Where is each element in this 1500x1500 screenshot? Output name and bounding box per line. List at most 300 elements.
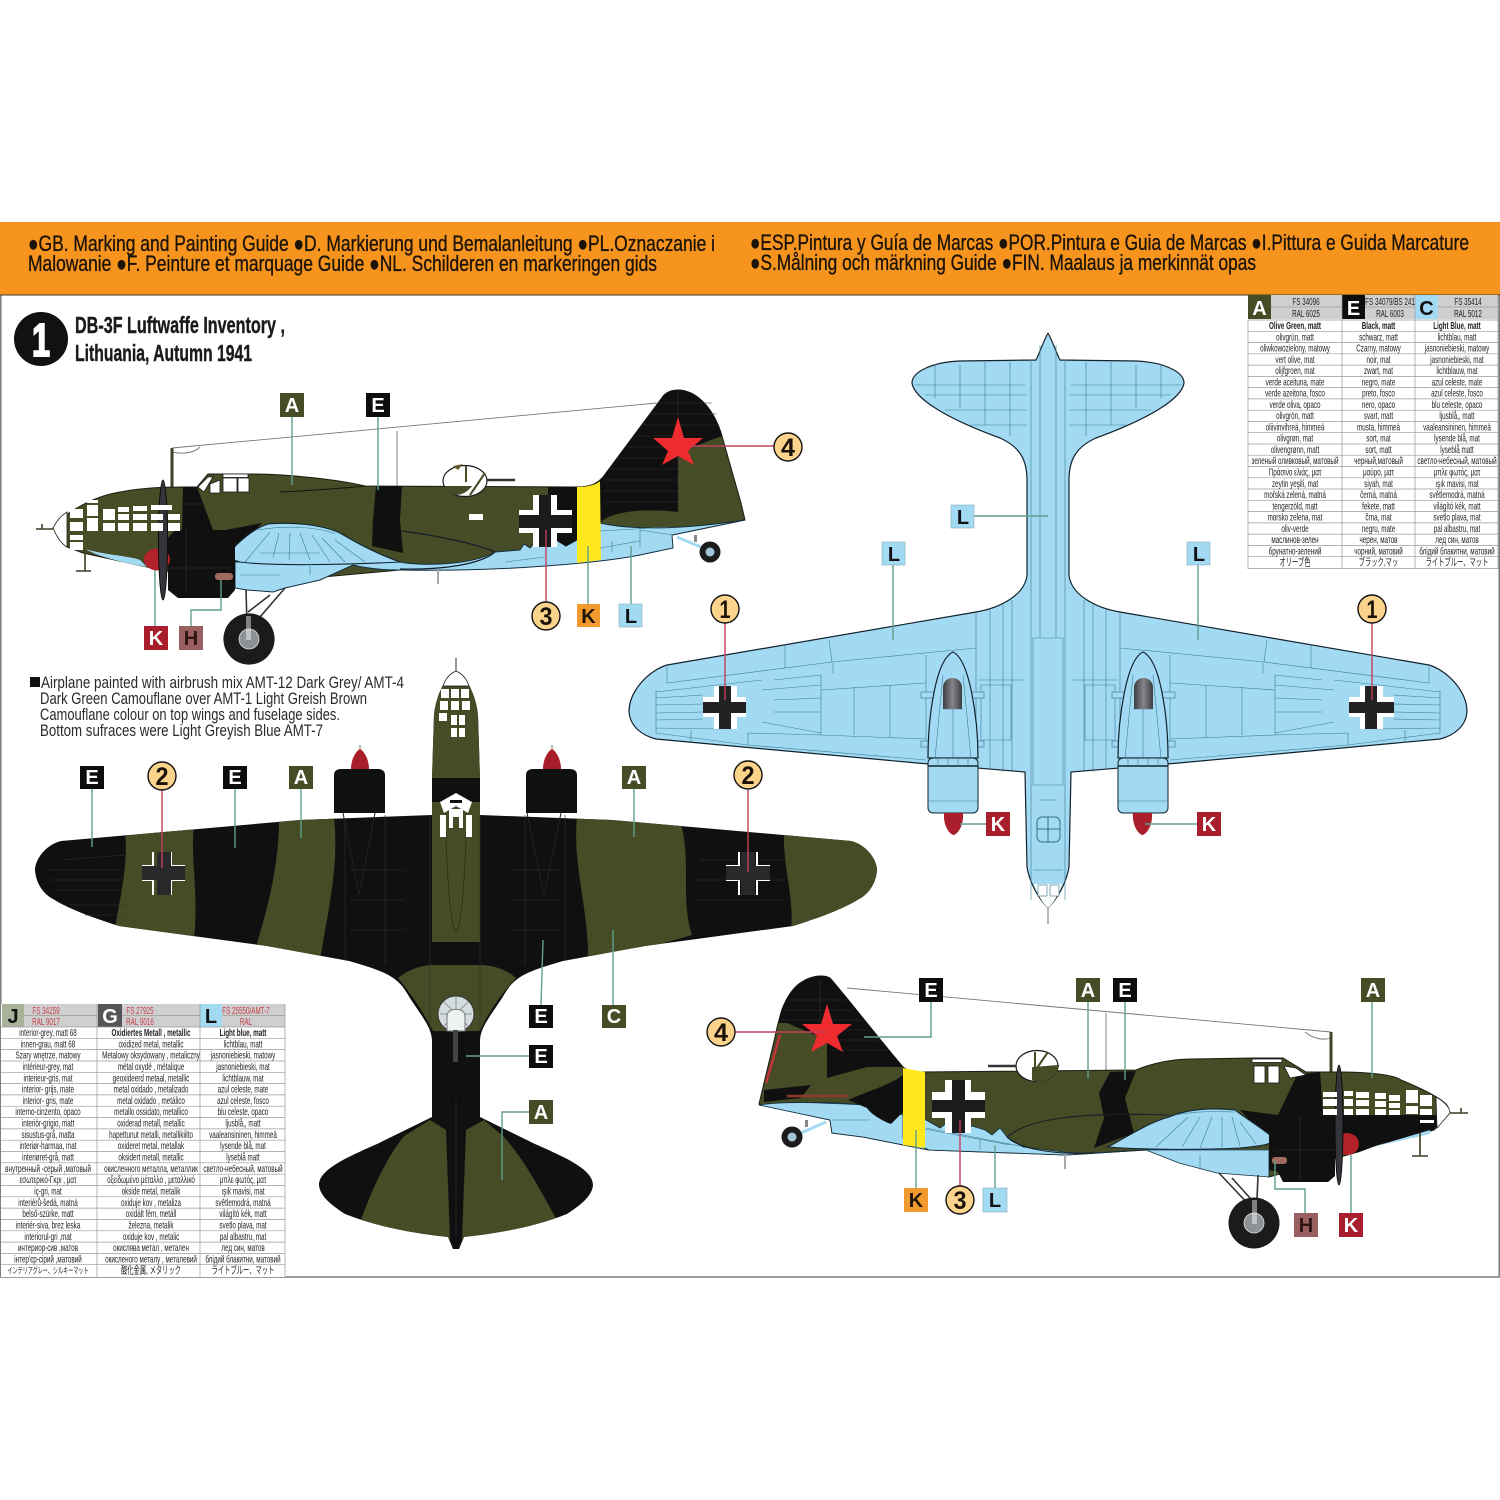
colour tag A, tailplane	[529, 1100, 553, 1124]
spinner red	[144, 548, 170, 570]
propeller	[158, 480, 168, 600]
column G names: окислява метал , метален	[113, 1241, 189, 1254]
outline	[629, 333, 1048, 908]
belly stub	[1064, 1155, 1066, 1169]
column J names: інтер'єр-сірий ,матовий	[14, 1253, 82, 1265]
soviet star	[802, 1004, 852, 1052]
column L names: azul celeste, mate	[218, 1083, 268, 1095]
callout 3, side view 2: 3	[954, 1187, 966, 1215]
fuselage olive base	[759, 976, 1450, 1177]
underside right half mirrored	[1048, 333, 1467, 908]
column G names: metal oxidado , metálico	[117, 1094, 185, 1106]
colour tag A, right wing top view	[622, 766, 646, 789]
column J names: interiør-harmaa, mat	[20, 1139, 77, 1152]
column A names: olivgrön, matt	[1276, 409, 1314, 422]
colour tag K, right spinner: K	[1202, 814, 1217, 836]
gunner turret	[1016, 1050, 1058, 1082]
column A names: olivengrønn, matt	[1271, 443, 1320, 455]
header codes C: FS 35414	[1454, 295, 1482, 307]
column J names: interior- gris, mate	[23, 1094, 73, 1106]
nacelle gear bay lines	[935, 675, 971, 758]
colour tag C	[602, 1005, 626, 1028]
column A names: tengerzöld, matt	[1272, 500, 1318, 512]
column L names: pal albastru, mat	[220, 1230, 267, 1242]
canopy	[1252, 1059, 1306, 1083]
callout 4, side view 2	[707, 1018, 735, 1047]
column C names: светло-небесный, матовый	[1417, 454, 1497, 467]
column J names: interior-grey, matt 68	[19, 1026, 77, 1038]
fin panel lines	[603, 392, 719, 512]
nose olive	[432, 671, 480, 778]
aircraft: top view	[35, 658, 885, 1249]
title	[75, 312, 285, 366]
column C names: ljusblå,, matt	[1439, 409, 1475, 422]
wing black shadow	[1240, 1110, 1278, 1145]
column J names: interieur-gris, mat	[24, 1072, 73, 1084]
column L names: ライトブルー、マット	[212, 1263, 274, 1276]
column C names: лед син, матов	[1435, 533, 1479, 546]
column C names: jasnoniebieski, matowy	[1424, 342, 1490, 354]
colour table: A E C: E	[1347, 298, 1360, 320]
nose glass	[1034, 884, 1062, 924]
scheme number badge: 1	[32, 314, 50, 366]
column A names: verde azeitona, fosco	[1265, 387, 1325, 399]
column C names: lichtblauw, mat	[1436, 364, 1478, 377]
colour tag E, fin side view 2	[919, 978, 943, 1002]
column L names: лед син, матов	[221, 1241, 265, 1254]
column C names: svetlo plava, mat	[1433, 511, 1481, 523]
colour tag H, side view 2: H	[1299, 1215, 1313, 1237]
balkenkreuz fuselage	[519, 495, 572, 547]
colour tag K, left spinner: K	[991, 814, 1006, 836]
engine block	[928, 758, 978, 813]
colour tag K orange, side view 1: K	[581, 606, 596, 628]
column J names: интериор-сив ,матов	[18, 1241, 78, 1254]
belly stub	[437, 570, 439, 584]
column G names: métal oxydé , métalique	[118, 1060, 184, 1072]
column C names: lysende blå, mat	[1434, 432, 1480, 444]
column E names: negru, mate	[1362, 522, 1395, 534]
colour tag L, left wing underside: L	[888, 544, 900, 566]
colour tag E, wing tip top view	[80, 766, 104, 789]
column A names: zeytin yeşili, mat	[1272, 477, 1318, 489]
colour tag E, fin side view 2: E	[924, 980, 938, 1002]
yellow band	[577, 481, 601, 563]
column J names: sisustus-grå, matta	[21, 1128, 75, 1140]
note text block: Bottom sufraces were Light Greyish Blue AMT-7	[40, 722, 323, 740]
colour tag A, side view 1: A	[285, 395, 299, 417]
blue belly	[759, 1103, 1269, 1177]
column L names: světlemodrá, matná	[215, 1196, 271, 1208]
column E names: sort, matt	[1365, 443, 1392, 455]
underside left half	[629, 333, 1048, 908]
column A names: olivgrøn, mat	[1277, 432, 1314, 444]
column G names: hapettunut metalli, metallikiilto	[109, 1128, 193, 1140]
header codes L: RAL	[240, 1015, 252, 1027]
colour tag H, side view 1: H	[184, 628, 198, 650]
column E names: zwart, mat	[1364, 364, 1393, 377]
wing cross right	[1349, 686, 1394, 729]
heading: right languages: ●S.Målning och märkning Guide ●FIN. Maalaus ja merkinnät opas	[750, 250, 1256, 275]
fin panel lines	[782, 980, 887, 1050]
column J names: interior- grijs, mate	[22, 1083, 74, 1095]
column L names	[203, 1026, 283, 1276]
title: Lithuania, Autumn 1941	[75, 340, 252, 366]
header codes E: FS 34079/BS 241	[1365, 295, 1415, 307]
column C names: jasnoniebieski, mat	[1430, 353, 1484, 365]
column C names: světlemodrá, matná	[1429, 488, 1485, 500]
column G names: oxiduje kov , metaliza	[121, 1196, 181, 1208]
wing upper blue	[1108, 1109, 1276, 1149]
column A names: Πράσινο ελιάς, ματ	[1269, 466, 1322, 478]
blue nose sliver	[85, 549, 147, 567]
column L names: jasnoniebieski, matowy	[210, 1049, 276, 1061]
column A names: брунатно-зелений	[1269, 545, 1321, 557]
column E names: черен, матов	[1359, 533, 1398, 546]
red callout lines: underside	[725, 623, 1372, 700]
column L names: blu celeste, opaco	[218, 1105, 268, 1118]
colour tag E, side view 1: E	[371, 395, 385, 417]
colour tag E, wing tip top view: E	[85, 767, 99, 789]
colour tag K, side view 1: K	[149, 628, 164, 650]
callout 4, side view 2: 4	[714, 1019, 728, 1047]
exhaust	[215, 573, 233, 580]
colour tag E, left wing top view	[223, 766, 247, 789]
leader lines: side view 2	[864, 1002, 1372, 1213]
colour tag L, fuselage underside: L	[957, 507, 969, 529]
wing cross right	[726, 852, 770, 895]
colour tag K, side view 1	[144, 626, 168, 650]
column A names: olivgrün, matt	[1276, 331, 1314, 343]
header codes J	[32, 1004, 60, 1027]
colour table: J G L	[1, 1004, 285, 1277]
nose glass tip	[53, 512, 67, 547]
column C names: μπλε φωτός, ματ	[1434, 466, 1481, 478]
column A names: mořská zelená, matná	[1264, 488, 1326, 500]
header codes A	[1292, 295, 1320, 319]
header codes L	[222, 1004, 270, 1027]
aircraft: left side view	[36, 390, 745, 665]
column G names: oxiderad metall, metallic	[117, 1117, 185, 1129]
heading: right languages	[750, 230, 1469, 275]
colour tag A, side view 2: A	[1081, 980, 1095, 1002]
callout 1, left wing	[711, 595, 739, 624]
colour tag E, side view 2: E	[1118, 980, 1132, 1002]
column L names: блідий блакитни, матовий	[205, 1253, 281, 1265]
column J names: interiorul-gri ,mat	[24, 1230, 72, 1242]
column J names: interiér-siva, brez leska	[16, 1219, 80, 1231]
nacelle outlines on wing	[343, 813, 561, 895]
column G names: oxideret metal, metallak	[118, 1139, 185, 1152]
propeller	[1335, 1065, 1343, 1185]
leader lines: top view	[92, 789, 634, 1180]
colour table: A E C: C	[1419, 298, 1434, 320]
header codes J: RAL 9017	[32, 1015, 60, 1027]
header codes J: FS 34259	[32, 1004, 60, 1016]
red callout lines: side view 2	[735, 1032, 960, 1186]
nose probes	[1412, 1108, 1468, 1156]
column L names: ljusblå,, matt	[225, 1117, 261, 1129]
colour tag L, right wing underside	[1187, 542, 1210, 566]
column E names: Black, matt	[1362, 319, 1395, 331]
colour tag K, side view 2: K	[1344, 1215, 1359, 1237]
column A names: vert olive, mat	[1275, 353, 1315, 365]
wing cross left	[142, 852, 185, 895]
column C names	[1417, 319, 1497, 568]
column G names: oxidized metal, metallic	[119, 1038, 184, 1050]
callout 4, side view 1: 4	[781, 434, 795, 462]
column E names: svart, matt	[1364, 409, 1394, 422]
spinner	[944, 813, 963, 835]
column E names: noir, mat	[1366, 353, 1391, 365]
colour tag L, right wing underside: L	[1193, 544, 1205, 566]
header codes C: RAL 5012	[1454, 307, 1482, 319]
callout 2, left wing top view	[148, 762, 176, 791]
column J names: Szary wnętrze, matowy	[16, 1049, 81, 1061]
column E names: črna, mat	[1365, 511, 1392, 523]
airframe black base	[35, 671, 877, 1249]
column A names: маслинов-зелен	[1271, 533, 1319, 546]
column E names: μαύρο, ματ	[1363, 466, 1394, 478]
column G names: oxiduje kov , metalic	[123, 1230, 180, 1242]
colour table: J G L: L	[205, 1006, 217, 1028]
column A names: зеленый оливковый, матовый	[1252, 454, 1339, 467]
colour tag E, side view 2	[1113, 978, 1137, 1002]
belly panel lines	[240, 527, 673, 575]
spinner red	[1335, 1133, 1359, 1155]
spine olive	[432, 802, 480, 942]
column G names: Oxidiertes Metall , metallic	[112, 1026, 191, 1038]
column J names: iç-gri, mat	[34, 1185, 62, 1197]
colour tag K, right spinner	[1197, 812, 1221, 836]
main wheel and strut	[223, 588, 285, 665]
fuselage olive base	[53, 390, 745, 585]
column E names: negro, mate	[1362, 376, 1395, 388]
colour tag K orange, side view 1	[577, 604, 600, 628]
blue belly	[235, 520, 745, 592]
column C names: azul celeste, fosco	[1431, 387, 1483, 399]
column A names: morsko zelena, mat	[1268, 511, 1323, 523]
leader lines: side view 1	[155, 417, 631, 626]
note text block: Camouflane colour on top wings and fuselage sides.	[40, 706, 340, 724]
column G names	[102, 1026, 200, 1276]
column L names: világító kék, matt	[219, 1207, 267, 1220]
header codes L: FS 25550/AMT-7	[222, 1004, 270, 1016]
column E names: černá, matná	[1360, 488, 1397, 500]
colour tag A, right wing top view: A	[627, 767, 641, 789]
column A names: oliivinvihreä, himmeä	[1266, 421, 1324, 433]
leader lines: underside	[893, 516, 1198, 824]
column J names: belső-szürke, matt	[22, 1207, 74, 1220]
heading: left languages: ●GB. Marking and Painting Guide ●D. Markierung und Bemalanleitung ●PL.Oznaczanie i	[28, 231, 715, 256]
colour table: J G L: J	[7, 1006, 19, 1028]
callout 3, side view 2	[946, 1186, 974, 1215]
engine cowling black	[1269, 1072, 1335, 1182]
colour tag A, tailplane: A	[534, 1102, 548, 1124]
fuselage black stripe	[372, 486, 403, 553]
header codes E	[1365, 295, 1415, 319]
column J names: interiøret-grå, matt	[22, 1151, 74, 1163]
bottom hatch	[1037, 817, 1060, 842]
belly panel	[832, 1120, 1269, 1170]
column C names: világító kék, matt	[1433, 500, 1481, 512]
white fuselage bar	[469, 514, 483, 520]
column L names: lyseblå matt	[226, 1151, 260, 1163]
heading: left languages: Malowanie ●F. Peinture et marquage Guide ●NL. Schilderen en markeringen gids	[28, 251, 657, 276]
wing root fairing line	[400, 531, 495, 569]
column L names: svetlo plava, mat	[219, 1219, 267, 1231]
title: DB-3F Luftwaffe Inventory ,	[75, 312, 285, 338]
colour tag A, left wing top view	[289, 766, 313, 789]
colour tag K orange, side view 2: K	[909, 1190, 924, 1212]
nose lower black	[1335, 1115, 1444, 1152]
column C names: Light Blue, matt	[1433, 319, 1481, 331]
engines black	[334, 769, 577, 813]
column C names: azul celeste, mate	[1432, 376, 1482, 388]
callout 1, right wing	[1358, 595, 1386, 624]
spinners red	[351, 749, 561, 769]
colour table: J G L: G	[102, 1006, 118, 1028]
column L names: jasnoniebieski, mat	[216, 1060, 270, 1072]
gunner turret	[443, 466, 487, 496]
column A names: verde aceituna, mate	[1266, 376, 1324, 388]
column E names: siyah, mat	[1364, 477, 1393, 489]
header codes A: RAL 6025	[1292, 307, 1320, 319]
colour tag H, side view 2	[1294, 1213, 1318, 1237]
column C names: блідий блакитни, матовий	[1419, 545, 1495, 557]
column J names: innen-grau, matt 68	[21, 1038, 75, 1050]
cowl lines	[168, 504, 232, 590]
soviet star	[653, 417, 703, 465]
colour tag C: C	[607, 1006, 621, 1028]
heading: left languages	[28, 231, 715, 276]
column E names: чорний, матовий	[1354, 545, 1403, 557]
callout 2, right wing top view	[734, 761, 762, 790]
tail plane blue	[759, 1103, 929, 1150]
tail wheel	[677, 535, 720, 562]
column E names: schwarz, matt	[1359, 331, 1398, 343]
colour tag K orange, side view 2	[904, 1188, 928, 1212]
instruction sheet frame	[1, 295, 1499, 1277]
panel lines on wings	[45, 815, 785, 1235]
panel lines	[656, 345, 1048, 900]
column L names: lysende blå, mat	[220, 1139, 266, 1152]
note text block: Dark Green Camouflane over AMT-1 Light Greish Brown	[40, 690, 367, 708]
aircraft: right side view	[759, 976, 1468, 1248]
callout 3, side view 1	[532, 602, 560, 631]
column G names: окисленого металу , металевий	[105, 1253, 197, 1265]
column C names: lichtblau, matt	[1438, 331, 1477, 343]
colour tag L, left wing underside	[882, 542, 905, 566]
wing root fillet olive	[398, 965, 516, 1031]
header codes G: RAL 9016	[126, 1015, 154, 1027]
column E names: черный,матовый	[1354, 454, 1403, 467]
column J names: внутренный -серый ,матовый	[5, 1162, 91, 1174]
colour tag E, rear fuselage	[529, 1045, 553, 1068]
column A names: Olive Green, matt	[1269, 319, 1321, 331]
header codes C	[1454, 295, 1482, 319]
column E names: sort, mat	[1366, 432, 1391, 444]
column L names: lichtblauw, mat	[222, 1072, 264, 1084]
column A names: oliwkowozielony, matowy	[1260, 342, 1330, 354]
note text block: Airplane painted with airbrush mix AMT-12 Dark Grey/ AMT-4	[41, 674, 404, 692]
colour tag A, side view 1	[280, 393, 304, 417]
dorsal turret	[438, 996, 474, 1062]
scheme number badge	[14, 312, 68, 366]
column C names: lyseblå matt	[1440, 443, 1474, 455]
header codes G	[126, 1004, 154, 1027]
fuselage spine detail	[445, 805, 467, 932]
column A names: oliv-verde	[1281, 522, 1309, 534]
column E names	[1354, 319, 1403, 568]
column E names: Czarny, matowy	[1356, 342, 1401, 354]
column L names: azul celeste, fosco	[217, 1094, 269, 1106]
header band	[0, 222, 1500, 295]
column G names: 酸化金属, メタリック	[121, 1263, 181, 1276]
balkenkreuz fuselage	[932, 1080, 985, 1133]
fuselage black stripe	[1094, 1071, 1136, 1148]
canopy	[198, 474, 249, 493]
nacelle	[928, 652, 978, 758]
black wing shadow	[225, 523, 262, 556]
column J names: インテリアグレー、シルキーマット	[7, 1265, 89, 1276]
colour tag E, left wing top view: E	[228, 767, 242, 789]
column G names: oksidert metall, metallic	[118, 1151, 184, 1163]
column G names: okside metal, metalik	[122, 1185, 181, 1197]
column G names: metal oxidado , metalizado	[114, 1083, 189, 1095]
wing upper blue	[227, 523, 400, 565]
antenna wire	[172, 403, 657, 487]
column E names: musta, himmeä	[1357, 421, 1400, 433]
colour tag E, side view 1	[366, 393, 390, 417]
antenna wire	[847, 988, 1331, 1072]
callout 2, right wing top view: 2	[742, 762, 754, 790]
colour tag A, side view 2	[1076, 978, 1100, 1002]
fin rear black blob	[848, 1075, 903, 1124]
red rudder hinge and bar	[766, 1035, 780, 1083]
wing fairing root line	[1007, 1114, 1169, 1153]
column L names: Light blue, matt	[220, 1026, 266, 1038]
header codes E: RAL 6003	[1376, 307, 1404, 319]
colour tag L, side view 2	[983, 1188, 1007, 1212]
colour tag A, left wing top view: A	[294, 767, 308, 789]
column G names: železna, metalik	[128, 1219, 174, 1231]
header codes A: FS 34096	[1292, 295, 1320, 307]
main wheel and strut	[1219, 1173, 1280, 1248]
red callout lines: side view 1	[546, 446, 774, 602]
column L names: lichtblau, matt	[224, 1038, 263, 1050]
colour tag E, rear fuselage: E	[534, 1046, 548, 1068]
colour tag L, side view 2: L	[989, 1190, 1001, 1212]
wing cross left	[703, 686, 746, 729]
exhaust	[1272, 1157, 1287, 1164]
colour tag K, side view 2	[1339, 1213, 1363, 1237]
colour tag L, side view 1: L	[625, 606, 637, 628]
callout 2, left wing top view: 2	[156, 763, 168, 791]
callout 1, right wing: 1	[1366, 596, 1378, 624]
header codes G: FS 27925	[126, 1004, 154, 1016]
red callout lines: top view	[162, 790, 748, 872]
column C names: blu celeste, opaco	[1432, 398, 1482, 410]
colour tag H, side view 1	[179, 626, 203, 650]
colour tag A, nose side view 2	[1361, 978, 1385, 1002]
column J names: interno-cinzento, opaco	[15, 1105, 81, 1118]
colour tag E, inner wing top view	[529, 1005, 553, 1028]
column L names: μπλε φωτός, ματ	[220, 1173, 267, 1186]
nose windows	[70, 500, 180, 550]
camouflage bands	[114, 810, 885, 1240]
column E names: nero, opaco	[1362, 398, 1395, 410]
